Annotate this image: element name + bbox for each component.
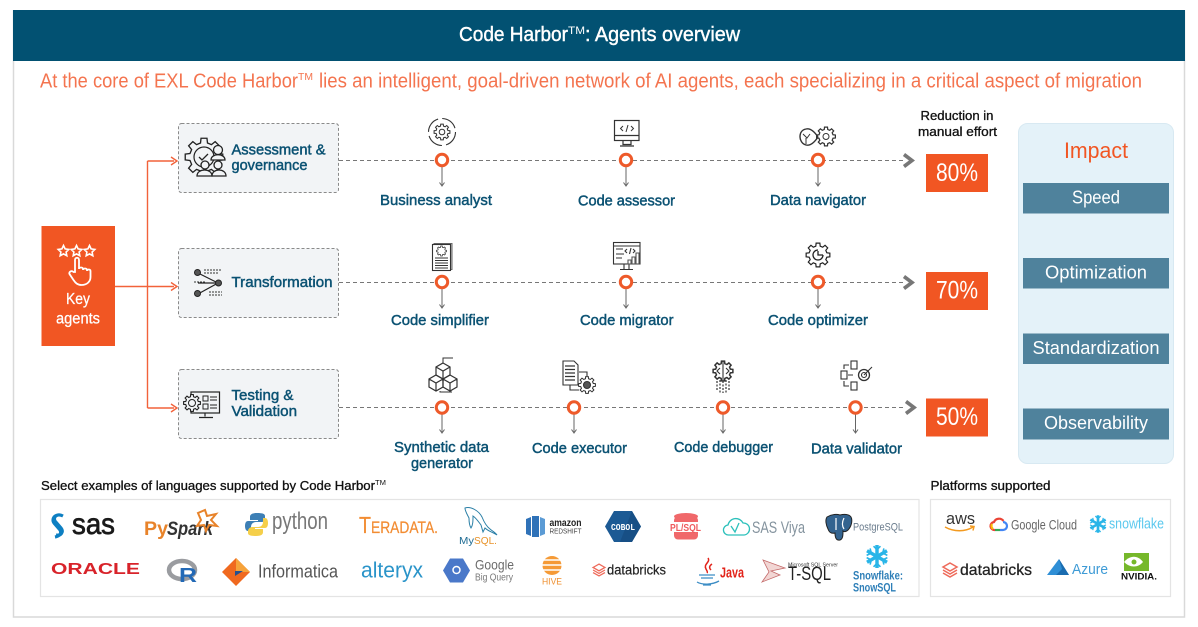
logo: MySQL: SQL. [474,535,497,547]
logo: T-SQL: T-SQL [788,564,831,585]
agent: data validator [811,361,902,458]
agent: business analyst [380,118,492,209]
icon: bug with code [713,361,733,393]
logo: Java: Java [720,564,744,582]
stat: 80 percent [926,154,988,192]
logo: Python [245,508,328,536]
impact item: speed [1023,183,1169,214]
panel: platforms [930,500,1170,596]
row 3 label box [178,370,338,438]
logo: PySpark: Spark [167,519,214,540]
key agents box: agents [56,310,100,328]
logo: Azure [1047,559,1108,578]
logo: Google BigQuery [443,556,514,584]
impact item: optimization [1023,258,1169,288]
agent: code executor: Code executor [532,441,627,457]
icon: document with gear [563,361,595,393]
panel: impact: Impact [1064,138,1128,163]
icon: monitor with code [614,120,639,146]
logo: SAS Viya [723,518,805,537]
logo: Amazon Redshift [526,516,582,537]
icon: infinity with gear [800,127,835,146]
logo: Snowflake [1090,515,1164,533]
logo: SAS Viya: SAS Viya [752,518,805,537]
logo: R: R [179,565,198,587]
agent: synthetic data generator [394,358,490,472]
logo: Teradata: ERADATA. [371,518,438,537]
row 1 label box: governance [232,158,308,174]
logo: PL/SQL [669,513,702,540]
logo: T-SQL: Microsoft SQL Server [788,562,838,568]
icon: document with gear [432,244,452,270]
row 2: transformation [178,242,988,329]
logo: Python: python [272,508,328,535]
logo: PySpark [144,510,217,540]
agent: data navigator: Data navigator [770,193,866,209]
agent: code debugger: Code debugger [674,440,773,456]
row 3 label box: Testing & [232,388,294,404]
agent: data navigator [770,127,866,209]
logo: Snowflake SnowSQL: SnowSQL [853,582,896,594]
impact item: standardization [1023,334,1169,364]
header bar [13,10,1185,61]
icon: target with data boxes [841,361,872,390]
row 1 label box [178,124,338,192]
logo: MySQL: My [459,535,475,547]
header bar: TM [568,25,585,37]
logo: PL/SQL: PL/SQL [670,522,701,534]
logo: Google BigQuery: Google [475,556,514,572]
logo: Databricks: databricks [607,562,666,578]
reduction heading: Reduction in [920,109,994,123]
icon: gauge gear [806,243,830,267]
logo: SAS [53,508,115,541]
logo: Alteryx: alteryx [361,558,423,582]
impact item: observability [1023,408,1169,440]
stat: 70 percent: 70% [936,276,978,304]
agent: business analyst: Business analyst [380,193,492,209]
logo: COBOL: COBOL [611,522,635,533]
icon: monitor with chart [614,242,640,270]
logo: Informatica: Informatica [258,562,339,582]
row 2 label box: Transformation [232,275,332,291]
logo: PostgreSQL [826,514,903,540]
arrow: row 2 chevron [904,276,912,288]
logo: Hive: HIVE [542,576,562,588]
arrow: row 1 chevron [904,154,912,166]
agent: code debugger [674,361,773,456]
stat: 50 percent [926,398,988,436]
impact item: observability: Observability [1044,413,1148,433]
key agents box [42,226,115,346]
logo: SAS: sas [72,508,115,541]
agent: code migrator [580,242,674,329]
logo: PySpark: Py [144,519,168,540]
agent: code optimizer [768,243,868,329]
icon: stacked cubes [429,358,457,392]
logo: Teradata: T [359,512,371,538]
logo: Azure: Azure [1072,561,1108,578]
row 1 label box: Assessment & [232,142,326,158]
agent: code migrator: Code migrator [580,313,674,329]
agent: code executor [532,361,627,457]
icon: monitor with checklist [184,392,220,418]
logo: Informatica [222,558,339,586]
agent: data validator: Data validator [811,442,902,458]
logo: Hive [542,556,562,588]
agent: code simplifier [391,244,489,329]
logo: Google BigQuery: Big Query [475,572,513,584]
logo: Snowflake SnowSQL: Snowflake: [853,570,903,582]
icon: rotating gear [428,118,456,146]
logo: R [169,561,198,587]
subtitle: At the core of EXL Code Harbor [40,70,298,92]
logo: Oracle: ORACLE [51,561,140,578]
panel: languages [40,500,919,596]
panel: impact [1018,124,1174,464]
logo: Java [697,558,744,585]
logo: Teradata [359,512,438,538]
subtitle: lies an intelligent, goal-driven network of AI agents, each specializing in a critical aspect of migration [319,70,1142,92]
logo: PostgreSQL: PostgreSQL [853,522,903,534]
agent: code assessor [578,120,675,210]
agent: code assessor: Code assessor [578,194,675,210]
logo: Amazon Redshift: amazon [550,517,582,529]
agent: code simplifier: Code simplifier [391,313,489,329]
agent: synthetic data generator: Synthetic data [394,440,490,456]
logo: MySQL [459,508,497,547]
logo: NVIDIA: NVIDIA. [1121,572,1157,582]
row 3: testing and validation [178,358,988,472]
impact item: speed: Speed [1072,188,1120,208]
key agents box: Key [66,291,90,308]
agent: synthetic data generator: generator [411,456,473,472]
languages heading: TM [375,478,386,487]
languages heading: Select examples of languages supported by Code Harbor [41,479,375,493]
logo: Google Cloud: Google Cloud [1011,518,1077,532]
header bar: Code Harbor [459,24,568,46]
logo: AWS: aws [946,509,975,528]
icon: gear with people [185,138,226,176]
impact item: optimization: Optimization [1045,262,1147,282]
platforms heading: Platforms supported [930,479,1051,493]
logo: Databricks: databricks [960,562,1032,579]
row 3 label box: Validation [232,404,297,420]
reduction heading [918,109,998,139]
reduction heading: manual effort [918,125,998,139]
row 2 label box [178,248,338,318]
logo: T-SQL [762,560,838,585]
icon: stars and hand [58,246,95,285]
logo: NVIDIA [1121,553,1157,582]
logo: COBOL [605,511,641,542]
impact item: standardization: Standardization [1032,338,1160,358]
agent: code optimizer: Code optimizer [768,313,868,329]
logo: Amazon Redshift: REDSHIFT [550,528,582,536]
row 1: assessment and governance [178,109,998,210]
stat: 50 percent: 50% [936,403,978,431]
logo: Snowflake: snowflake [1109,516,1164,532]
logo: Google Cloud [990,518,1077,532]
connector arrows from key agents [115,157,177,412]
stat: 80 percent: 80% [936,159,978,187]
subtitle: TM [298,72,313,83]
arrow: row 3 chevron [906,402,914,414]
logo: Snowflake SnowSQL [853,545,903,594]
icon: nodes converging [194,270,222,296]
header bar: : Agents overview [585,24,741,46]
stat: 70 percent [926,272,988,310]
